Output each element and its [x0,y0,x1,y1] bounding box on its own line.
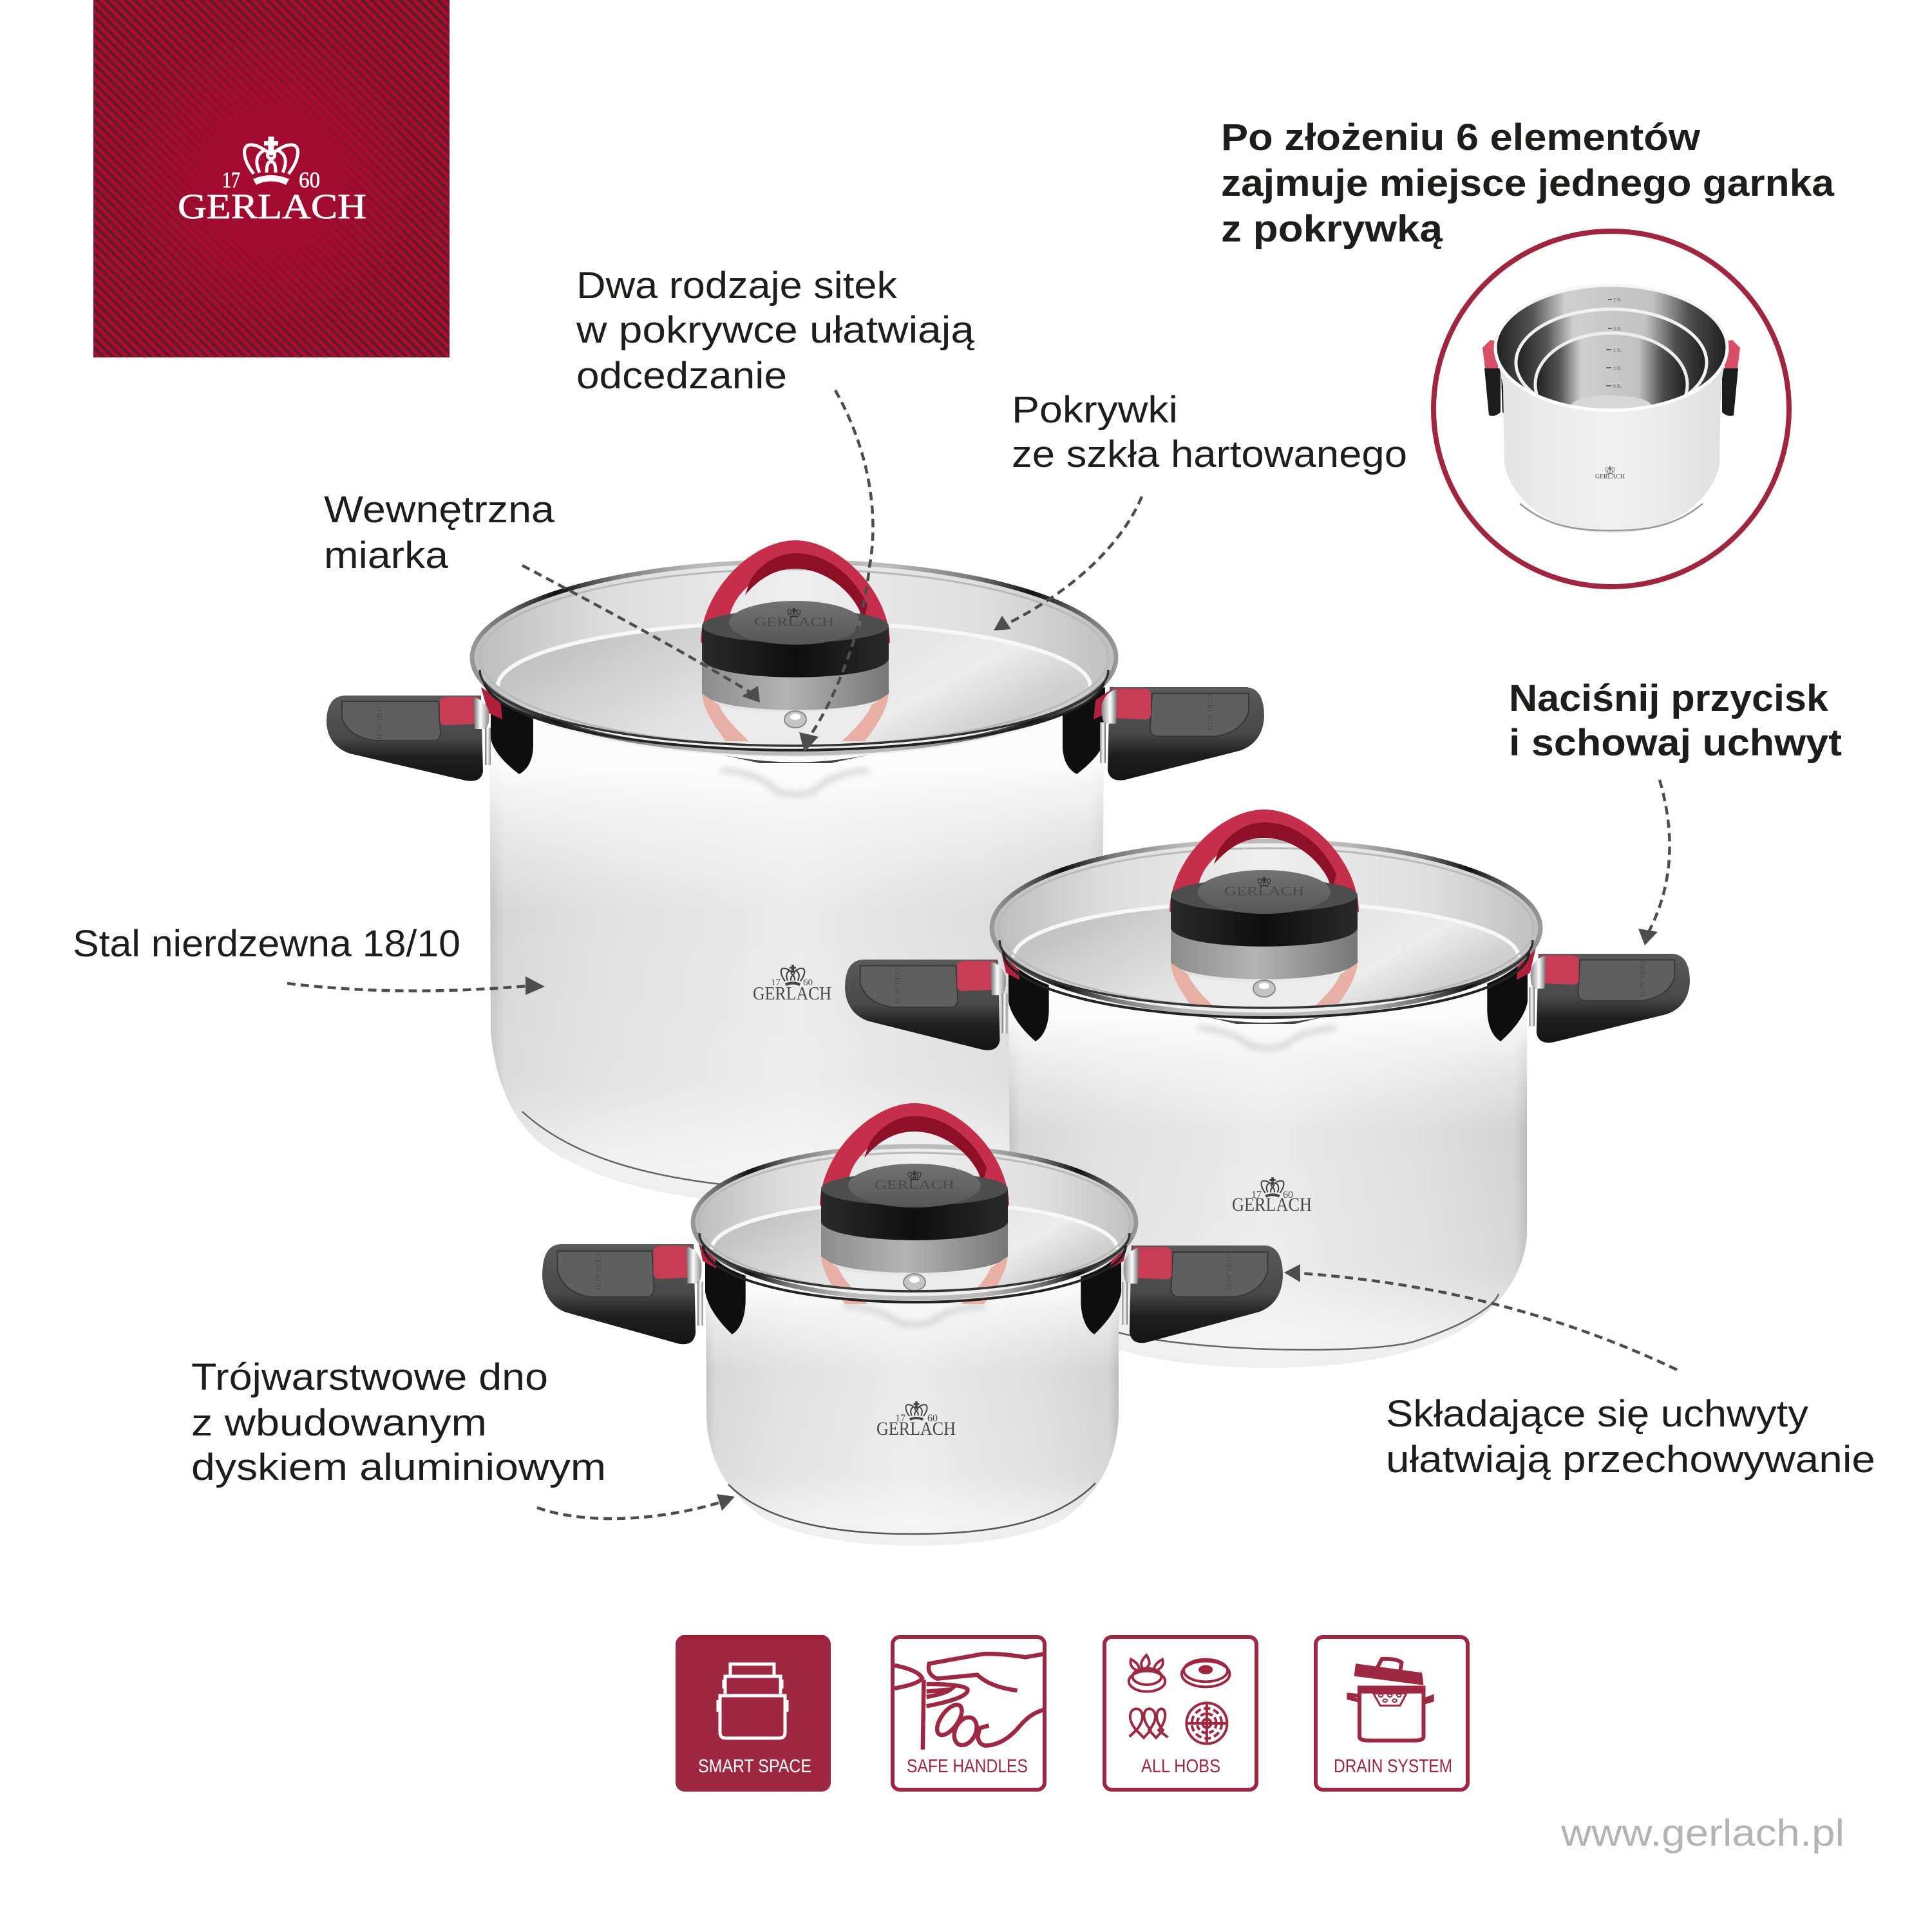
heading: folded size [1221,117,1835,250]
heading: folded size: z pokrywką [1221,208,1443,250]
outer pot body [1495,348,1727,533]
label: triple layer base: dyskiem aluminiowym [191,1446,606,1488]
arrow: lid [994,497,1142,630]
lid glass [692,1145,1137,1300]
pot logo: 17 [1251,1189,1262,1200]
spout shading [844,1306,985,1325]
arrow: steel [287,976,545,995]
lid knob [1170,810,1359,947]
shadow right [1063,687,1115,774]
lid knob [701,540,890,677]
label: press button: Naciśnij przycisk [1509,677,1829,719]
left handle [845,960,1007,1050]
icon: drain system [1316,1637,1468,1790]
capacity marks: 3.0L [1613,327,1622,332]
label: internal measure: miarka [324,535,449,576]
pot logo: 60 [803,978,813,988]
nested rims [1495,285,1727,410]
icon: safe handles: SAFE HANDLES [907,1756,1028,1777]
label: press button [1509,677,1842,764]
label: tempered glass lids: Pokrywki [1012,389,1178,431]
left handle [542,1244,703,1344]
shadow left [999,944,1049,1041]
folded handles left [1482,340,1511,416]
shadow left [481,687,533,774]
right handle: GERLACH [1638,961,1647,998]
left handle: GERLACH [594,1254,603,1291]
label: tempered glass lids: ze szkła hartowanego [1012,433,1407,475]
label: sieve lid: w pokrywce ułatwiają [576,309,975,351]
capacity marks [1606,298,1622,389]
heading: folded size: zajmuje miejsce jednego garnka [1221,162,1835,204]
large pot body [489,658,1104,1204]
stacked pots glyph [718,1664,787,1738]
shadow right [1487,944,1537,1041]
shadow left [696,1230,746,1334]
lid knob: GERLACH [1224,884,1304,898]
pot logo: GERLACH [753,984,831,1004]
pot logo: GERLACH [876,1418,956,1439]
lid rim [480,670,1108,757]
label: folding handles [1386,1393,1875,1481]
logo wordmark [178,167,366,226]
label: sieve lid: odcedzanie [576,355,787,397]
label: folding handles: Składające się uchwyty [1386,1393,1808,1435]
capacity marks: 1.5L [1613,348,1622,353]
pot: small [542,1103,1283,1546]
brand logo panel [93,0,450,357]
hand glyph [895,1654,1044,1750]
pot rim front [1495,348,1727,410]
lid knob: GERLACH [754,615,834,629]
icon: smart space [676,1635,831,1792]
shadow right [1081,1230,1130,1334]
pot logo [876,1401,956,1439]
right handle: GERLACH [1206,694,1215,731]
capacity marks: 2.0L [1613,298,1622,303]
folded handles right [1711,340,1740,416]
right handle [1122,1245,1283,1343]
lid glass [990,840,1542,1016]
capacity marks: 1.0L [1613,366,1622,371]
pot logo: 60 [1283,1189,1293,1200]
pot logo [1232,1177,1312,1215]
label: triple layer base: z wbudowanym [191,1402,487,1444]
pot: large [327,540,1264,1204]
label: folding handles: ułatwiają przechowywanie [1386,1439,1875,1481]
hob glyphs [1129,1655,1230,1744]
left handle: GERLACH [375,703,384,740]
capacity marks: 0.5L [1613,384,1622,389]
pot logo: GERLACH [1232,1194,1312,1215]
pot logo: 17 [771,978,781,988]
label: internal measure: Wewnętrzna [324,489,555,531]
left handle: GERLACH [893,967,902,1004]
spout shading [721,770,869,795]
icon: safe handles [893,1637,1045,1790]
heading: folded size: Po złożeniu 6 elementów [1221,117,1701,158]
pot logo: 17 [895,1413,905,1424]
icon: all hobs [1104,1637,1256,1790]
icon: drain system: DRAIN SYSTEM [1334,1756,1452,1777]
arrow: button [1638,780,1670,945]
pot: medium [845,810,1690,1368]
reflection [1171,925,1358,1010]
lid rim [699,1233,1130,1301]
spout shading [1198,1028,1336,1048]
right handle [1529,954,1690,1043]
small logo [1595,466,1625,480]
right handle [1100,687,1264,781]
logo wordmark: 60 [299,167,320,193]
left handle [327,696,491,781]
label: sieve lid [576,265,975,397]
lid knob [820,1103,1009,1240]
arrow: base [537,1494,735,1519]
pot with sieve glyph [1349,1659,1432,1741]
arrow: measure [522,565,760,703]
label: sieve lid: Dwa rodzaje sitek [576,265,898,307]
reflection [702,656,889,741]
circle: nested pots [1434,231,1789,587]
pot logo [753,965,831,1004]
reflection [821,1219,1008,1304]
small pot body [705,1222,1119,1546]
medium pot body [1009,928,1527,1368]
label: triple layer base [191,1356,606,1488]
logo wordmark: 17 [222,167,240,193]
icon: crown [245,137,298,185]
label: internal measure [324,489,555,576]
small logo: GERLACH [1595,473,1625,480]
label: tempered glass lids [1012,389,1407,475]
logo wordmark: GERLACH [178,187,366,226]
arrow: handles [1284,1264,1677,1370]
right handle: GERLACH [1225,1254,1234,1291]
label: press button: i schowaj uchwyt [1509,722,1842,764]
icon: all hobs: ALL HOBS [1141,1756,1220,1777]
lid rim [999,940,1533,1018]
lid glass [471,561,1117,754]
arrow: sieve [799,390,873,752]
icon: smart space: SMART SPACE [698,1756,811,1777]
website: www.gerlach.pl [1560,1812,1844,1854]
pot logo: 60 [927,1413,938,1424]
label: stainless steel: Stal nierdzewna 18/10 [73,923,460,965]
lid knob: GERLACH [875,1178,954,1192]
label: triple layer base: Trójwarstwowe dno [191,1356,548,1398]
